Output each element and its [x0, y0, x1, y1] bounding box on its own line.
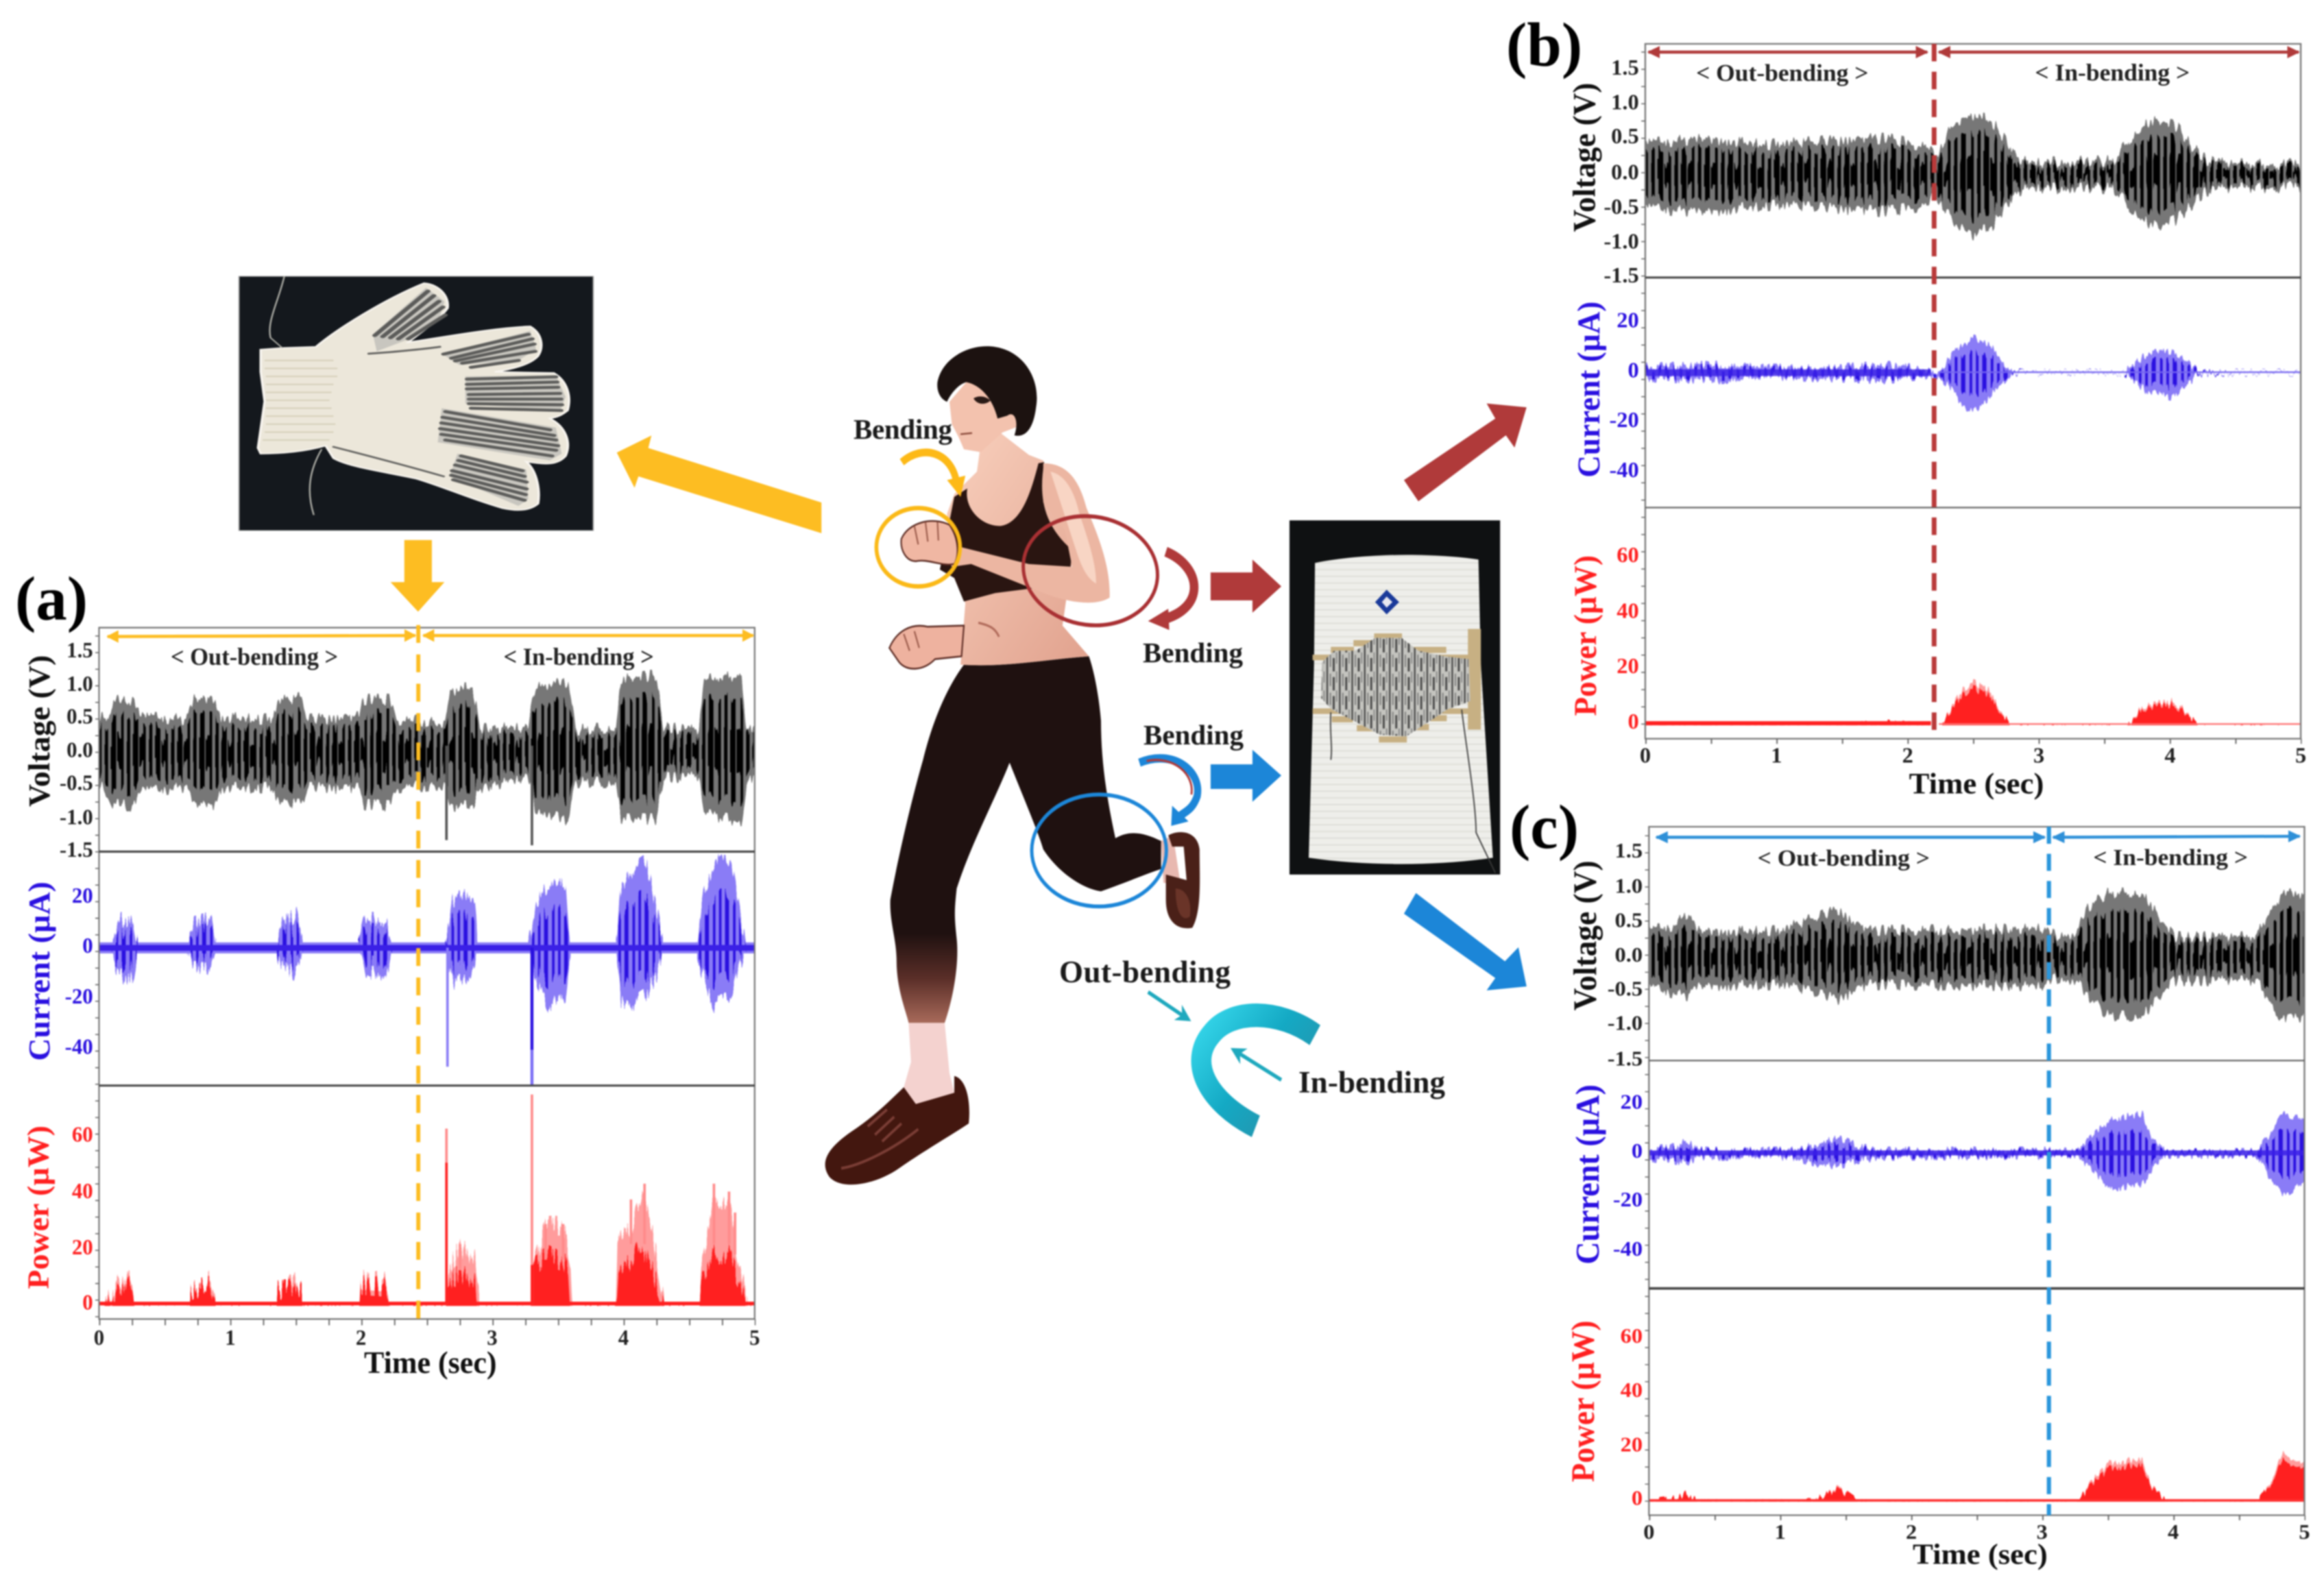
arrow: knee to sleeve [1211, 750, 1281, 802]
voltage axis c: 0.5 [1615, 908, 1643, 932]
conductive thread zones [373, 288, 566, 506]
time axis a [94, 1325, 760, 1380]
power axis c: 40 [1621, 1378, 1643, 1402]
voltage axis a: -0.5 [60, 770, 93, 795]
label: elbow bending: Bending [1143, 637, 1244, 668]
voltage axis a [23, 637, 93, 862]
current axis a: 20 [72, 884, 93, 908]
voltage axis a: 0.5 [66, 704, 93, 729]
time axis b: Time (sec) [1909, 767, 2044, 800]
chart frame b [1643, 44, 2302, 741]
label: wrist bending: Bending [854, 413, 953, 445]
voltage axis b: 0.0 [1611, 160, 1639, 184]
time axis a: 1 [225, 1325, 236, 1350]
region labels b: < In-bending > [2035, 60, 2190, 86]
region labels a [171, 643, 654, 670]
time axis c: 2 [1906, 1520, 1917, 1544]
time axis c: 0 [1643, 1520, 1654, 1544]
glove photo and yellow arrows [239, 276, 821, 611]
region labels a: < Out-bending > [171, 643, 338, 670]
current axis c: 20 [1621, 1090, 1643, 1113]
time axis c: 3 [2037, 1520, 2048, 1544]
power axis b: 20 [1617, 653, 1639, 678]
voltage trace a [99, 675, 760, 845]
power axis c: 60 [1621, 1324, 1643, 1348]
runner front lower leg and shoe [825, 1023, 969, 1184]
time axis a: 5 [749, 1325, 760, 1350]
voltage axis b: 1.0 [1611, 90, 1639, 114]
power axis a: 60 [72, 1122, 93, 1147]
curved arrow: knee bending [1139, 758, 1198, 826]
current axis a: -40 [65, 1034, 93, 1059]
icon: curved beam [1201, 1015, 1315, 1126]
region labels b: < Out-bending > [1696, 60, 1869, 86]
voltage axis c: -1.0 [1608, 1011, 1643, 1034]
power axis a: Power (µW) [21, 1125, 55, 1289]
power axis b [1568, 542, 1639, 733]
time axis b: 1 [1771, 743, 1782, 767]
time axis b: 0 [1640, 743, 1651, 767]
time axis c: 4 [2168, 1520, 2179, 1544]
voltage axis c: -1.5 [1608, 1047, 1643, 1070]
time axis c: 1 [1775, 1520, 1786, 1544]
split line b [1931, 44, 1937, 738]
photo: sensor glove [239, 276, 593, 531]
voltage axis a: -1.0 [60, 805, 93, 829]
current axis a: -20 [65, 984, 93, 1008]
chart frame c [1647, 827, 2305, 1518]
runner leggings [891, 657, 1161, 1023]
time axis c [1643, 1520, 2310, 1570]
arrow: sleeve to chart c [1404, 893, 1527, 990]
voltage trace b [1645, 114, 2307, 234]
region labels b [1696, 60, 2190, 86]
marker ring: knee [1032, 794, 1166, 906]
current axis a: Current (µA) [23, 881, 56, 1061]
voltage axis b: -0.5 [1603, 194, 1639, 219]
time axis a: 0 [94, 1325, 104, 1350]
region labels c [1758, 845, 2248, 871]
runner face and hair [937, 346, 1037, 452]
runner rear foot [1161, 832, 1200, 928]
voltage axis b [1566, 55, 1639, 287]
arrow: elbow to sleeve [1211, 559, 1281, 613]
curved arrow: elbow bending [1148, 552, 1194, 630]
voltage axis c [1567, 839, 1643, 1070]
panel label (c): (c) [1510, 792, 1579, 862]
label: out-bending: Out-bending [1059, 955, 1231, 989]
current axis a [23, 881, 93, 1061]
runner front arm [942, 463, 1110, 603]
voltage trace c [1649, 893, 2310, 1021]
region arrows a [108, 635, 753, 637]
current axis a: 0 [82, 933, 93, 958]
arrow: out-bending [1148, 992, 1189, 1019]
arrow: in-bending [1233, 1049, 1281, 1080]
current axis c: -20 [1613, 1188, 1643, 1211]
arrow: runner to glove [617, 435, 821, 533]
current trace b [1645, 338, 2301, 413]
voltage axis a: -1.5 [60, 837, 93, 862]
region arrows b [1649, 50, 2299, 54]
panel (b): upper-arm signal charts [1566, 44, 2307, 800]
voltage axis b: -1.0 [1603, 229, 1639, 253]
power trace a [99, 1095, 755, 1323]
region labels a: < In-bending > [503, 643, 654, 670]
arrow: sleeve to chart b [1404, 404, 1527, 501]
voltage axis a: 0.0 [66, 738, 93, 762]
illustration: runner [825, 346, 1200, 1184]
current axis c: 0 [1632, 1139, 1643, 1163]
voltage axis c: Voltage (V) [1567, 861, 1603, 1010]
current axis b: Current (µA) [1571, 302, 1606, 478]
power axis b: Power (µW) [1568, 555, 1603, 716]
voltage axis b: -1.5 [1603, 263, 1639, 287]
current trace c [1649, 1114, 2304, 1197]
panel label (b): (b) [1506, 10, 1582, 80]
time axis a: 4 [618, 1325, 629, 1350]
time axis a: 2 [356, 1325, 366, 1350]
power axis b: 60 [1617, 542, 1639, 567]
region labels c: < Out-bending > [1758, 846, 1930, 871]
photo: sensor sleeve [1290, 520, 1500, 875]
power trace c [1648, 1450, 2305, 1503]
power axis c: 20 [1621, 1433, 1643, 1456]
panel (a): glove signal charts [21, 625, 760, 1380]
region arrows c [1656, 836, 2300, 837]
power trace b [1645, 679, 2301, 727]
voltage axis c: -0.5 [1608, 977, 1643, 1000]
curved arrow: wrist bending [902, 452, 965, 497]
panel label (a): (a) [15, 564, 88, 633]
power axis b: 40 [1617, 598, 1639, 622]
current axis b: 20 [1617, 308, 1639, 332]
region labels c: < In-bending > [2093, 845, 2248, 871]
label: in-bending: In-bending [1298, 1065, 1445, 1099]
current axis b [1571, 302, 1639, 482]
power axis b: 0 [1627, 709, 1639, 733]
voltage axis c: 0.0 [1615, 943, 1643, 966]
current axis c [1570, 1084, 1643, 1265]
power axis c: Power (µW) [1565, 1320, 1601, 1482]
voltage axis a: Voltage (V) [23, 655, 56, 807]
voltage axis c: 1.5 [1615, 839, 1643, 862]
current axis c: -40 [1613, 1237, 1643, 1261]
time axis c: Time (sec) [1913, 1539, 2048, 1570]
time axis a: Time (sec) [364, 1345, 497, 1380]
current axis b: -20 [1609, 407, 1639, 432]
current axis c: Current (µA) [1570, 1084, 1606, 1265]
time axis b [1640, 743, 2306, 800]
split line c [2046, 827, 2052, 1516]
power axis a: 0 [82, 1290, 93, 1314]
power axis a: 20 [72, 1234, 93, 1259]
marker ring: wrist [876, 508, 960, 586]
voltage axis b: Voltage (V) [1566, 83, 1602, 232]
power axis c: 0 [1632, 1486, 1643, 1509]
current trace a [99, 861, 755, 1086]
central illustration [825, 346, 1527, 1184]
split line a [415, 625, 421, 1319]
voltage axis b: 1.5 [1611, 55, 1639, 80]
runner torso [940, 433, 1089, 666]
power axis a [21, 1122, 93, 1314]
voltage axis a: 1.5 [66, 637, 93, 662]
label: knee bending: Bending [1143, 719, 1244, 751]
panel (c): knee signal charts [1565, 827, 2310, 1570]
current axis b: -40 [1609, 457, 1639, 482]
voltage axis b: 0.5 [1611, 123, 1639, 148]
current axis b: 0 [1627, 358, 1639, 382]
time axis c: 5 [2299, 1520, 2310, 1544]
time axis b: 2 [1902, 743, 1913, 767]
time axis a: 3 [487, 1325, 498, 1350]
voltage axis a: 1.0 [66, 671, 93, 696]
voltage axis c: 1.0 [1615, 874, 1643, 897]
arrow: glove to chart a [391, 540, 444, 611]
power axis a: 40 [72, 1178, 93, 1203]
chart frame a [97, 628, 755, 1322]
runner fist [901, 521, 958, 565]
marker ring: elbow [1019, 509, 1162, 633]
time axis b: 4 [2164, 743, 2176, 767]
power axis c [1565, 1320, 1643, 1509]
time axis b: 5 [2295, 743, 2306, 767]
runner rear hand [889, 626, 964, 669]
time axis b: 3 [2033, 743, 2044, 767]
